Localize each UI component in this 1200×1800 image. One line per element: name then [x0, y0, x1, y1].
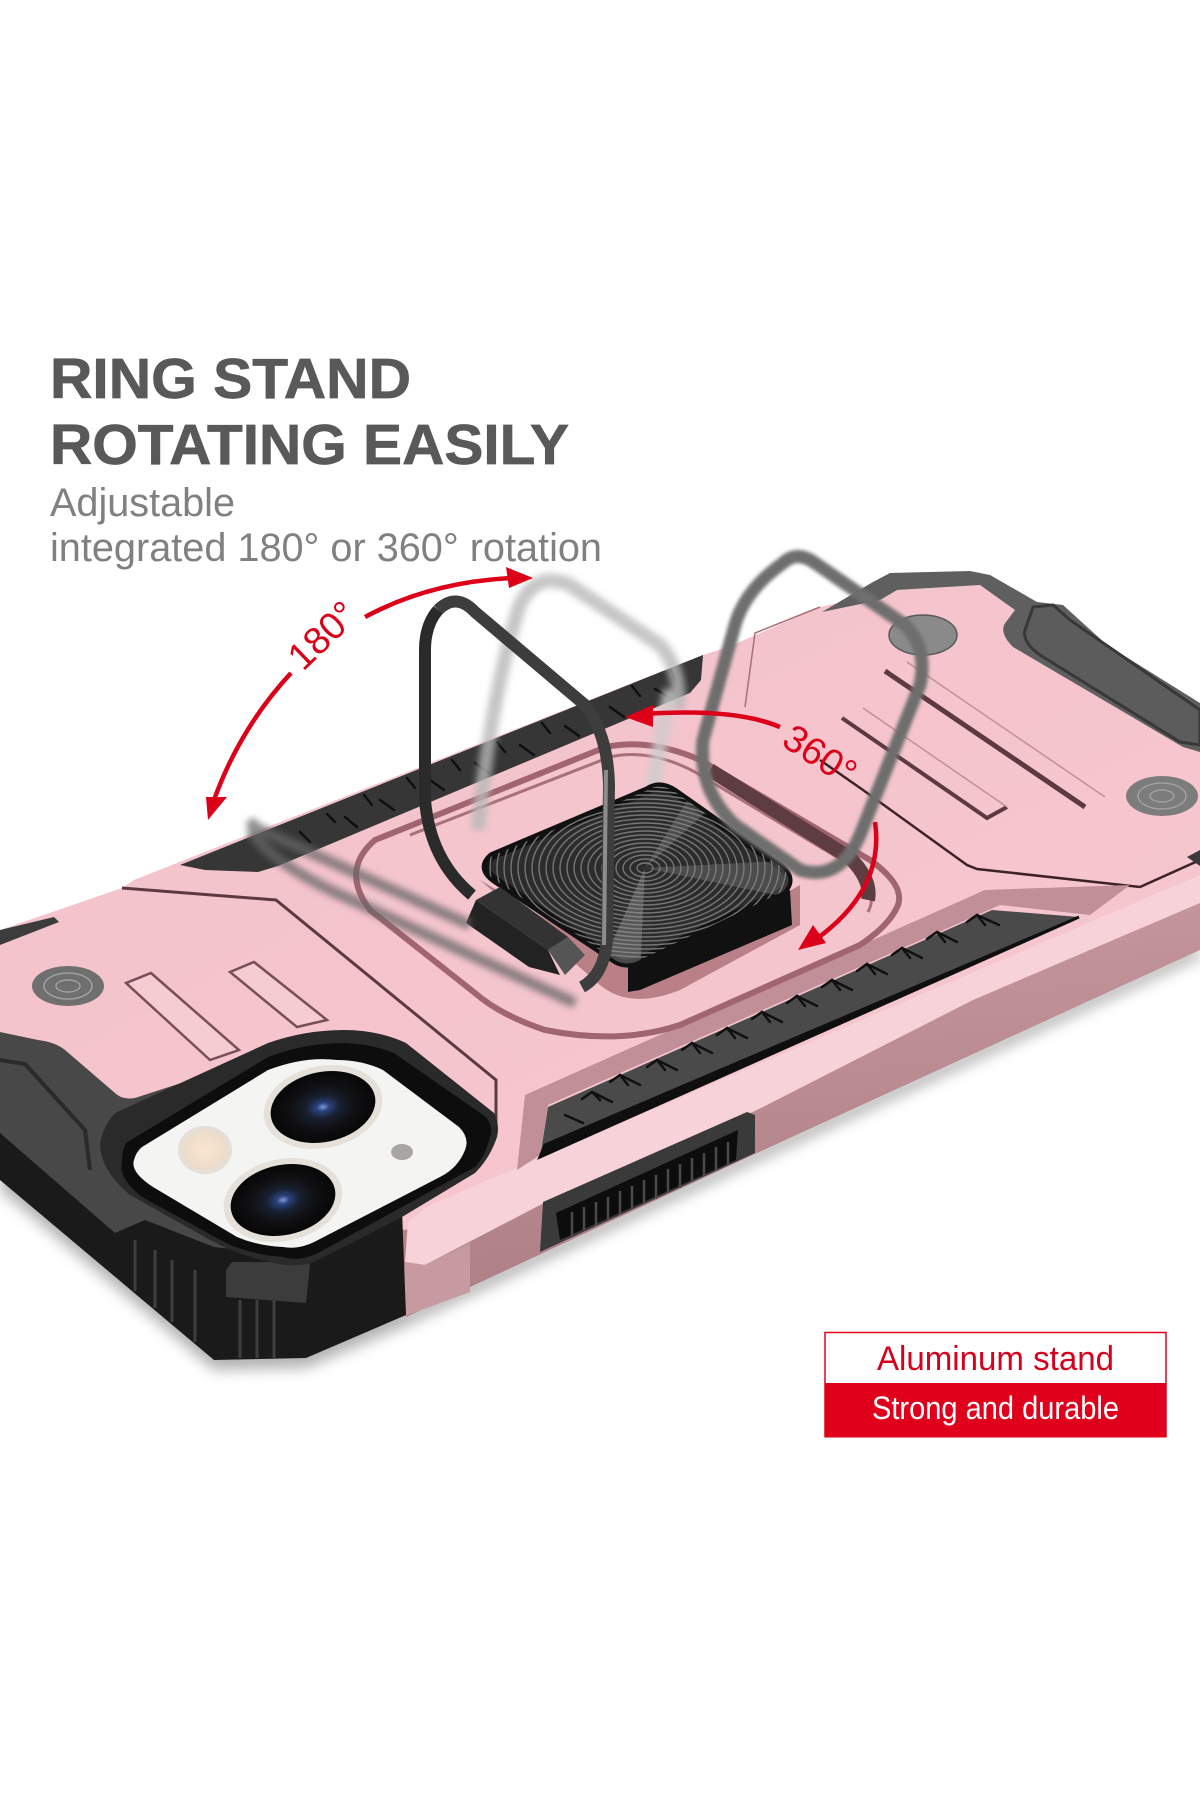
ring recess	[356, 744, 899, 1036]
drop shadow	[0, 945, 1200, 1370]
camera inner rim	[121, 1043, 491, 1259]
right slots	[842, 662, 1105, 818]
lens bottom	[216, 1147, 350, 1253]
right blurred ring	[702, 556, 922, 872]
arrowhead left	[625, 705, 653, 727]
lens top	[256, 1054, 390, 1160]
ghost ring	[478, 581, 679, 830]
subtitle	[50, 481, 602, 570]
corner block	[226, 1262, 310, 1303]
arrowhead top	[506, 567, 533, 588]
right bumper	[822, 571, 1200, 752]
subtitle line 1: Adjustable	[50, 481, 235, 525]
title line 2: ROTATING EASILY	[50, 413, 569, 477]
bumper inner strip	[1025, 605, 1200, 745]
left slots	[126, 962, 327, 1060]
microphone	[391, 1144, 413, 1160]
lower rubber strip	[540, 910, 1079, 1157]
arrowhead bottom	[206, 797, 227, 820]
bumper side black	[0, 1120, 406, 1360]
upright sharp ring	[425, 601, 609, 987]
callout: aluminum stand	[824, 1332, 1166, 1438]
lower strip tread marks	[565, 915, 999, 1123]
right thin seam	[745, 607, 820, 707]
top strip tread marks	[300, 670, 675, 842]
bumper top surface	[0, 1030, 490, 1257]
recess dark band	[710, 770, 869, 900]
left plate seam	[122, 888, 496, 1130]
base disc	[486, 779, 800, 992]
grooves	[489, 786, 788, 964]
camera glass	[133, 1059, 467, 1248]
top-left dark notch	[0, 917, 59, 945]
callout red band	[824, 1383, 1166, 1438]
hinge	[466, 887, 585, 975]
label: 180 degrees: 180°	[280, 594, 366, 678]
corner ribs	[135, 1240, 274, 1358]
lower-left dark pink pillar	[402, 1243, 470, 1317]
arrow: 180 degree rotation	[206, 567, 533, 820]
coin right	[1126, 776, 1198, 816]
arrow: 360 degree rotation	[625, 705, 876, 950]
callout heading: Aluminum stand	[877, 1340, 1114, 1378]
recess inner line	[410, 755, 871, 912]
small right notch	[1187, 850, 1200, 866]
camera island	[100, 1030, 498, 1266]
port teeth	[556, 1130, 738, 1240]
title line 1: RING STAND	[50, 347, 411, 411]
label: 360 degrees: 360°	[775, 717, 864, 795]
subtitle line 2: integrated 180° or 360° rotation	[50, 526, 602, 570]
top rubber strip	[180, 655, 703, 872]
side port	[540, 1112, 755, 1252]
lower-left bumper	[0, 1030, 498, 1360]
phone case	[0, 556, 1200, 1370]
callout subheading: Strong and durable	[872, 1390, 1119, 1426]
lower rubber strip rim	[517, 885, 1130, 1170]
coin top right	[889, 615, 957, 655]
base under-shadow	[480, 880, 800, 999]
side face	[400, 895, 1200, 1317]
top pink surface	[0, 585, 1200, 1230]
flat blurred ring	[250, 820, 575, 1003]
title	[50, 347, 569, 477]
flash	[179, 1127, 231, 1173]
arrowhead lower	[798, 925, 826, 950]
highlight wedges	[646, 800, 704, 868]
right plate seam	[820, 760, 1200, 887]
light edge band	[405, 875, 1200, 1265]
coin left	[32, 966, 104, 1006]
bumper highlight channel	[0, 1060, 90, 1170]
